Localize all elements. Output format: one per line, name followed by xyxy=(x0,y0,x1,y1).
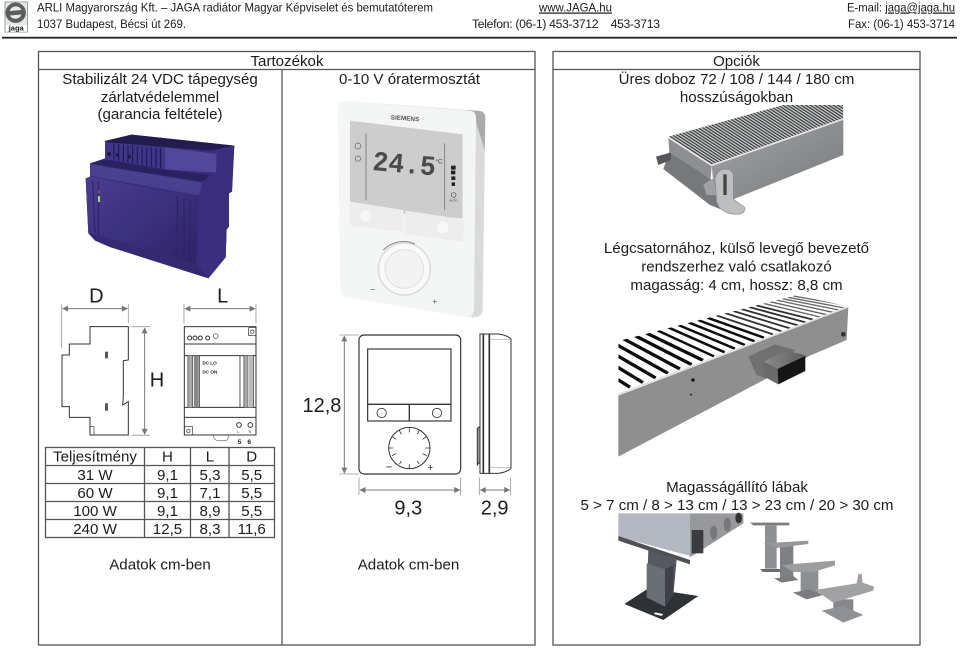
pedestal with box xyxy=(618,513,743,620)
stand 5 to 7 cm xyxy=(815,574,874,623)
stand 20 to 30 cm xyxy=(750,523,789,572)
front view labels: L xyxy=(237,430,239,434)
table: power supply dimensions xyxy=(46,448,274,538)
front view labels: DC ON xyxy=(202,369,218,374)
leveling feet description: 5 > 7 cm / 8 > 13 cm / 13 > 23 cm / 20 > 30 cm xyxy=(581,497,893,514)
power supply description: zárlatvédelemmel xyxy=(101,89,219,106)
table header row: Teljesítmény xyxy=(53,449,137,466)
email: E-mail: jaga@jaga.hu xyxy=(847,0,955,14)
side view xyxy=(477,334,511,473)
heading: accessories: Tartozékok xyxy=(251,53,324,70)
front view xyxy=(359,335,461,474)
thermostat dimension drawing xyxy=(303,334,511,519)
row 31 W: 5,5 xyxy=(241,467,262,484)
power supply description: (garancia feltétele) xyxy=(97,106,223,123)
thermostat buttons xyxy=(350,202,403,232)
page header xyxy=(2,0,957,39)
power supply dimension drawing xyxy=(62,285,256,446)
row 100 W: 9,1 xyxy=(157,503,178,520)
thermostat dial xyxy=(378,243,430,295)
row 31 W: 9,1 xyxy=(157,467,178,484)
row 240 W: 11,6 xyxy=(238,521,266,538)
stand 13 to 23 cm xyxy=(763,541,808,583)
row 31 W xyxy=(77,467,262,484)
thermostat photo: − xyxy=(370,285,375,295)
row 240 W: 240 W xyxy=(73,521,118,538)
display xyxy=(350,121,463,218)
row 60 W: 7,1 xyxy=(200,485,220,502)
row 100 W xyxy=(73,503,262,520)
front view labels: 5 xyxy=(238,439,242,446)
front view labels: 6 xyxy=(247,439,251,446)
row 100 W: 100 W xyxy=(73,503,118,520)
front view xyxy=(184,327,256,441)
heading: options: Opciók xyxy=(713,53,760,70)
dimension H xyxy=(132,327,164,435)
dial minus and plus xyxy=(386,462,433,474)
JAGA logo xyxy=(5,2,28,33)
side view xyxy=(62,327,128,435)
stand 8 to 13 cm xyxy=(782,561,835,599)
front view labels: N xyxy=(249,430,252,434)
address: 1037 Budapest, Bécsi út 269. xyxy=(37,17,186,31)
front view labels xyxy=(202,361,252,446)
note: power supply units: Adatok cm-ben xyxy=(109,556,211,574)
fax: Fax: (06-1) 453-3714 xyxy=(848,17,955,31)
duct connector description: magasság: 4 cm, hossz: 8,8 cm xyxy=(630,277,843,294)
display temperature: 24.5 xyxy=(371,148,437,184)
panel: options xyxy=(553,52,920,645)
leveling feet description: Magasságállító lábak xyxy=(666,479,808,496)
thermostat photo: °C xyxy=(435,157,443,165)
duct connector photo xyxy=(618,296,848,456)
row 31 W: 31 W xyxy=(77,467,113,484)
row 31 W: 5,3 xyxy=(200,467,220,484)
table header row: D xyxy=(246,449,257,466)
row 60 W: 9,1 xyxy=(157,485,178,502)
row 100 W: 8,9 xyxy=(200,503,220,520)
company name: ARLI Magyarország Kft. – JAGA radiátor Magyar Képviselet és bemutatóterem xyxy=(37,0,433,14)
thermostat photo: AUTO xyxy=(449,198,458,202)
row 240 W: 8,3 xyxy=(200,521,220,538)
empty box photo xyxy=(656,105,843,214)
empty box description: Üres doboz 72 / 108 / 144 / 180 cm xyxy=(619,71,854,88)
row 100 W: 5,5 xyxy=(241,503,262,520)
row 60 W: 60 W xyxy=(77,485,113,502)
JAGA logo: jaga xyxy=(8,24,25,33)
dial minus and plus: − xyxy=(386,462,392,474)
power supply description: Stabilizált 24 VDC tápegység xyxy=(62,71,258,88)
table header row: L xyxy=(206,449,214,466)
thermostat photo: SIEMENS xyxy=(391,114,419,123)
dimension L xyxy=(184,285,256,323)
row 240 W: 12,5 xyxy=(153,521,182,538)
row 60 W xyxy=(77,485,262,502)
row 240 W xyxy=(73,521,266,538)
website: www.JAGA.hu xyxy=(538,0,612,14)
dial minus and plus: + xyxy=(427,463,433,474)
duct connector description: Légcsatornához, külső levegő bevezető xyxy=(604,240,869,257)
dimension 9,3: 9,3 xyxy=(394,497,422,519)
power supply photo xyxy=(86,135,234,278)
front view labels: DC LO xyxy=(202,361,217,366)
dimension 12,8 xyxy=(303,335,359,474)
dimension 12,8: 12,8 xyxy=(303,395,341,417)
dimension L: L xyxy=(217,285,228,307)
thermostat photo xyxy=(338,101,485,317)
dimension 9,3 xyxy=(359,478,461,519)
dimension D xyxy=(62,285,128,348)
dimension 2,9: 2,9 xyxy=(481,497,509,519)
dimension H: H xyxy=(150,370,164,392)
table header row: H xyxy=(162,449,173,466)
note: thermostat units: Adatok cm-ben xyxy=(358,556,459,574)
dimension 2,9 xyxy=(479,478,511,519)
duct connector description: rendszerhez való csatlakozó xyxy=(641,258,832,276)
panel: accessories xyxy=(38,52,535,645)
row 60 W: 5,5 xyxy=(241,485,262,502)
thermostat photo: + xyxy=(432,297,437,306)
dimension D: D xyxy=(89,285,104,307)
empty box description: hosszúságokban xyxy=(680,89,793,106)
table header row xyxy=(53,449,257,466)
thermostat description: 0-10 V óratermosztát xyxy=(339,71,481,88)
phone numbers: Telefon: (06-1) 453-3712 453-3713 xyxy=(472,17,660,31)
leveling feet photo xyxy=(618,513,874,623)
